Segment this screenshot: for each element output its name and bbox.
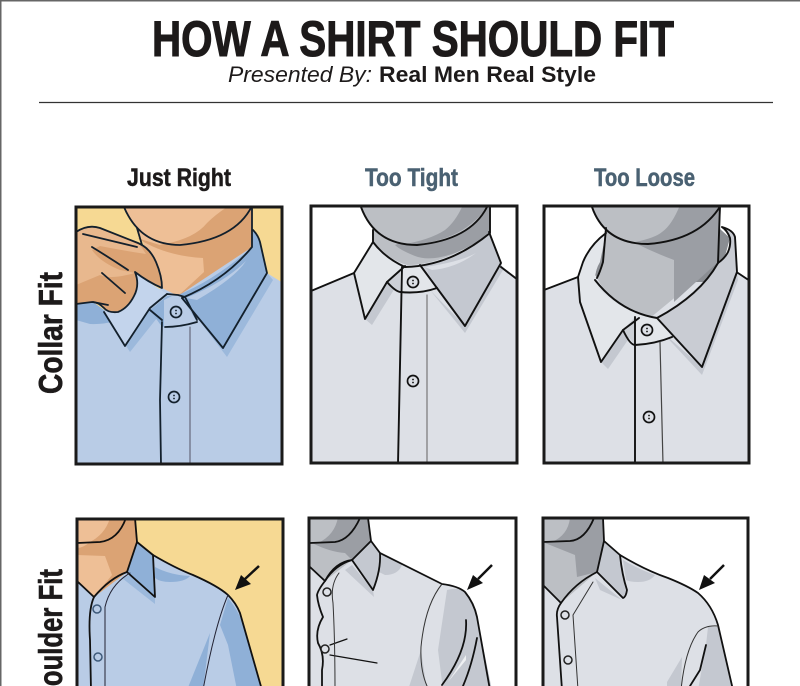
panel: shoulder just right — [77, 518, 284, 686]
subtitle — [228, 62, 596, 87]
icon: button — [561, 611, 572, 664]
panel: shoulder too loose — [543, 517, 748, 686]
subtitle: Real Men Real Style — [379, 62, 596, 87]
arrow — [467, 565, 492, 590]
column heading: Too Loose: Too Loose — [594, 164, 695, 192]
column heading: Too Tight: Too Tight — [365, 164, 459, 192]
panel: collar too loose — [543, 205, 751, 464]
icon: button — [642, 324, 654, 422]
icon: button — [321, 588, 331, 653]
subtitle: Presented By: — [228, 62, 372, 87]
arrow — [235, 566, 259, 590]
column heading: Just Right: Just Right — [127, 164, 232, 192]
row label: Collar Fit: Collar Fit — [32, 272, 69, 394]
panel: collar too tight — [310, 205, 518, 464]
panel: shoulder too tight — [309, 517, 516, 686]
icon: button — [408, 276, 418, 386]
icon: button — [93, 605, 102, 661]
icon: button — [168, 306, 182, 402]
arrow — [699, 565, 724, 590]
title: HOW A SHIRT SHOULD FIT — [152, 11, 674, 67]
panel: collar just right — [75, 206, 283, 465]
